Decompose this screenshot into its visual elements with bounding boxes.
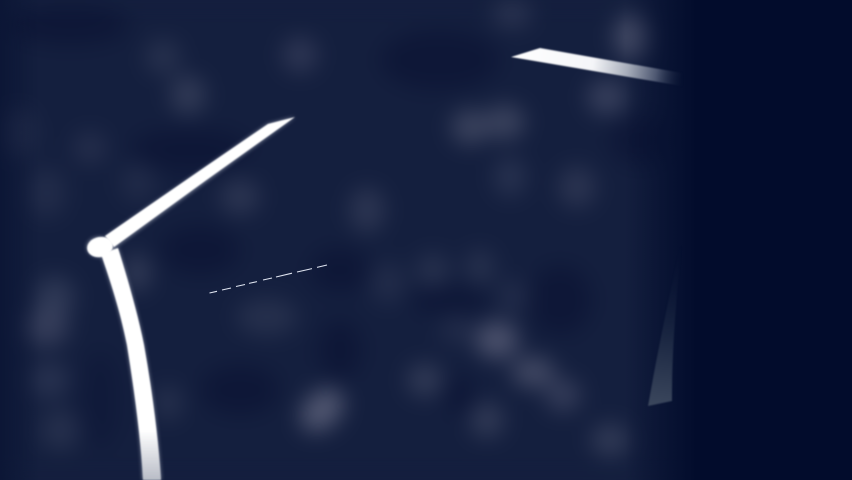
right faint shard bbox=[648, 240, 682, 406]
lower arm bbox=[101, 248, 161, 480]
dark left vignette bbox=[0, 0, 40, 480]
hub bbox=[85, 235, 115, 259]
stroke glow bbox=[87, 117, 295, 480]
dark right vignette bbox=[625, 0, 697, 480]
top-right stroke bbox=[511, 48, 682, 86]
white stroke: hub and arms bbox=[85, 117, 295, 480]
dashed line bbox=[210, 265, 327, 293]
upper arm bbox=[105, 117, 295, 247]
